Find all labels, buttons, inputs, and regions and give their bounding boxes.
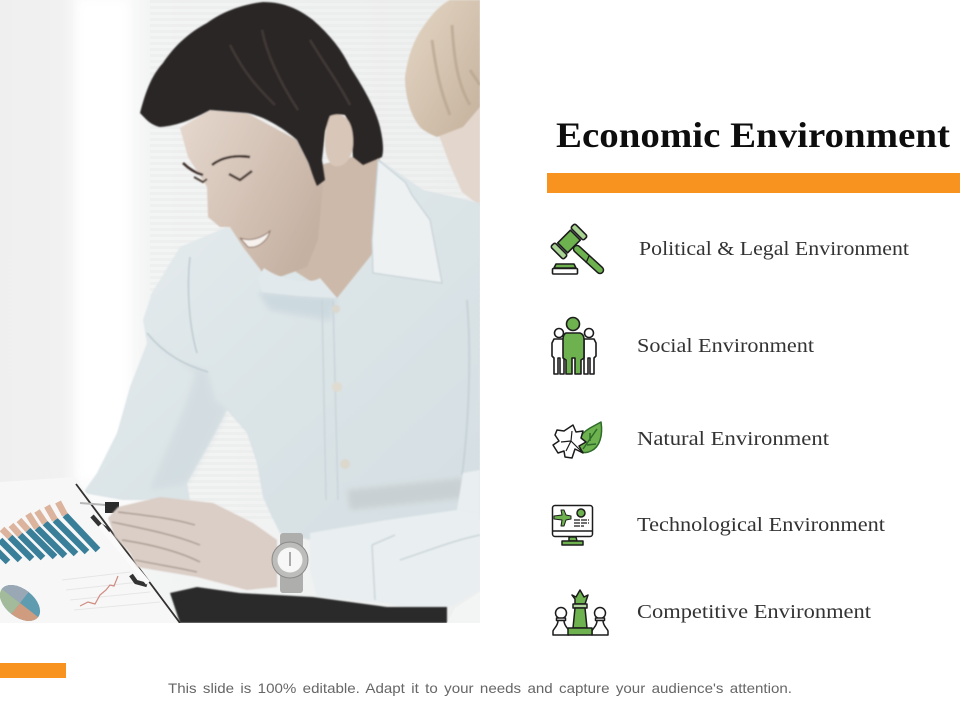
pen (80, 502, 119, 513)
bar chart on paper (0, 502, 98, 562)
woman's head (405, 0, 480, 206)
photo: businessman reviewing charts (0, 0, 480, 628)
chart paper on clipboard (0, 477, 180, 628)
shirt fold shading (347, 478, 463, 510)
man's neck and face (180, 110, 380, 298)
man's shirt (83, 160, 480, 540)
man's hand (108, 497, 277, 590)
orange title bar (547, 173, 960, 193)
label: technological: Technological Environment (637, 514, 885, 536)
label: natural: Natural Environment (637, 428, 829, 450)
shirt cuff and forearm (310, 470, 480, 610)
label: competitive: Competitive Environment (637, 601, 871, 623)
pie chart on paper (0, 585, 40, 621)
orange footer accent (0, 663, 66, 678)
man's collar (258, 160, 442, 298)
chair arm (447, 621, 448, 623)
footer note: This slide is 100% editable. Adapt it to your needs and capture your audience's attention. (168, 680, 792, 696)
icon: leaves (553, 422, 602, 458)
line chart on paper (62, 572, 160, 610)
icon: gavel (551, 224, 600, 274)
title: Economic Environment (556, 115, 950, 155)
icon: chess pieces (553, 590, 608, 635)
label: political and legal: Political & Legal Environment (639, 238, 909, 260)
icon: group of people (552, 318, 596, 374)
wristwatch (272, 533, 308, 593)
label: social: Social Environment (637, 335, 814, 357)
photo background: office window (0, 0, 480, 623)
icon: monitor (552, 506, 592, 545)
man's hair (140, 2, 383, 186)
dark trousers (170, 587, 447, 623)
